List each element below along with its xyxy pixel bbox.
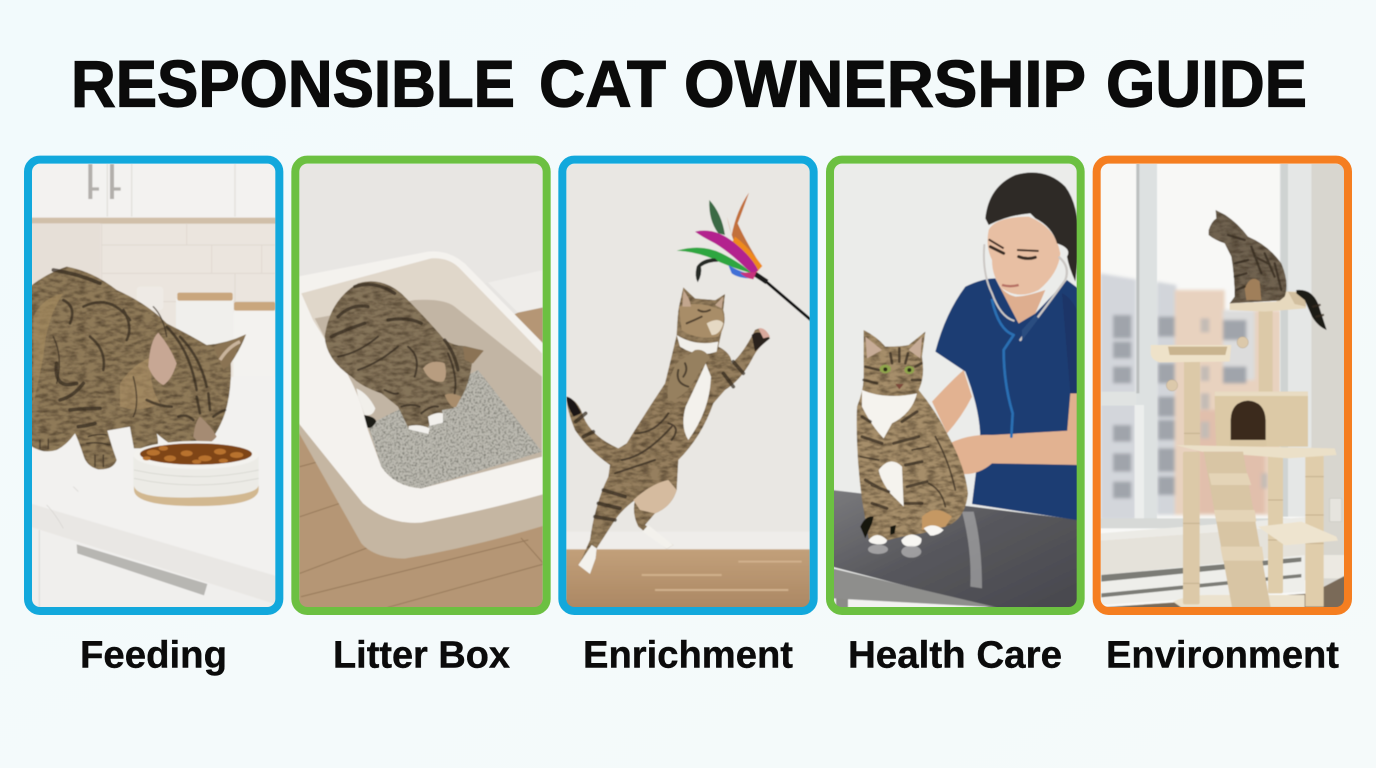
blurred city buildings bbox=[1100, 273, 1281, 520]
panel: feeding bbox=[28, 160, 279, 611]
label: Litter Box: Litter Box bbox=[333, 634, 510, 676]
panel: litter box bbox=[295, 160, 547, 611]
food bowl with kibble bbox=[133, 441, 259, 506]
green frame bbox=[295, 160, 547, 611]
title: OWNERSHIP bbox=[684, 46, 1086, 120]
title: RESPONSIBLE bbox=[71, 46, 515, 120]
tabby cat looking out the window bbox=[1209, 210, 1327, 330]
panel: enrichment bbox=[562, 160, 814, 611]
leaping tabby cat bbox=[566, 287, 770, 574]
infographic canvas bbox=[24, 60, 1352, 676]
blue frame bbox=[562, 160, 814, 611]
title bbox=[71, 46, 1307, 120]
orange frame bbox=[1097, 160, 1348, 611]
photo: tabby cat eating from a bowl on a kitchen counter bbox=[30, 163, 278, 610]
panel: health care bbox=[830, 160, 1081, 611]
title: GUIDE bbox=[1106, 46, 1307, 120]
label: Health Care: Health Care bbox=[848, 634, 1062, 676]
cat tree bbox=[1151, 292, 1338, 607]
tabby cat bbox=[325, 281, 484, 434]
veterinarian bbox=[931, 173, 1080, 521]
blue frame bbox=[28, 160, 279, 611]
photo: veterinarian examining a cat with a stethoscope bbox=[832, 163, 1081, 610]
green frame bbox=[830, 160, 1081, 611]
photo: cat leaping at a feather wand toy bbox=[564, 163, 813, 610]
feather wand toy bbox=[677, 193, 812, 321]
sitting tabby cat bbox=[857, 330, 968, 547]
tabby cat bbox=[30, 267, 246, 469]
label: Enrichment: Enrichment bbox=[583, 634, 793, 676]
photo: tabby cat in a litter box on a wood floor bbox=[297, 163, 546, 610]
title: CAT bbox=[539, 46, 666, 120]
label: Environment: Environment bbox=[1106, 634, 1339, 676]
photo: cat on a tall cat tree by a window bbox=[1098, 163, 1346, 610]
panel: environment bbox=[1097, 160, 1348, 611]
label: Feeding: Feeding bbox=[80, 634, 227, 676]
